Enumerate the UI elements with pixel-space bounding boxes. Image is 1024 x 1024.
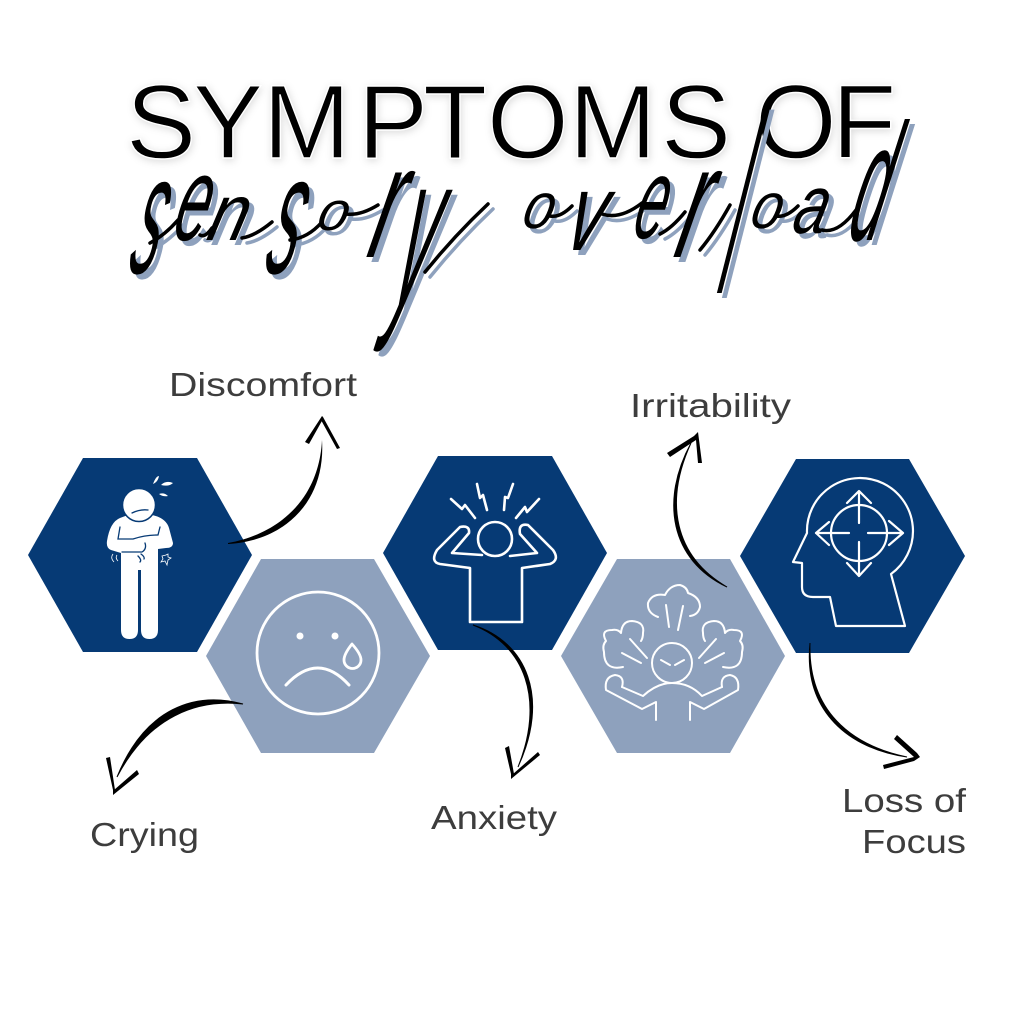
label: loss of focus: Loss of — [842, 782, 967, 819]
hexagon: anxiety — [383, 456, 607, 650]
title: sensory overload script: a — [786, 158, 842, 251]
title: sensory overload script: o — [517, 170, 565, 242]
title: sensory overload script: o — [312, 180, 358, 242]
arrow: to loss of focus — [809, 643, 920, 769]
title: sensory overload script: r — [663, 114, 737, 292]
title: sensory overload script: d — [836, 90, 918, 276]
arrow: to discomfort — [228, 416, 340, 544]
arrow: to irritability — [667, 432, 727, 587]
hexagon: loss of focus — [740, 459, 965, 653]
label: anxiety: Anxiety — [431, 799, 558, 836]
icon: angry person with steam clouds — [603, 585, 743, 720]
arrow: to anxiety — [473, 625, 540, 779]
icon: head with focus target — [793, 478, 913, 626]
icon: person holding stomach — [107, 476, 173, 639]
label: loss of focus: Focus — [862, 823, 966, 860]
title: sensory overload script: v — [557, 151, 626, 273]
label: crying: Crying — [90, 816, 199, 853]
title: sensory overload script: r — [356, 114, 430, 292]
title: symptoms of: SYMPTOMS OF — [126, 64, 896, 181]
title: sensory overload script: n — [201, 169, 262, 258]
title: sensory overload script — [117, 57, 918, 353]
title: sensory overload script: s — [253, 119, 331, 309]
hexagon: irritability — [561, 559, 785, 753]
title: sensory overload script: e — [164, 131, 230, 266]
arrow: to crying — [106, 700, 243, 795]
hexagon: crying — [206, 559, 430, 753]
label: irritability: Irritability — [630, 387, 792, 424]
icon: sad face with tear — [257, 592, 379, 714]
label: discomfort: Discomfort — [169, 366, 357, 403]
title: sensory overload script: o — [745, 170, 793, 242]
title: sensory overload script: s — [117, 119, 192, 310]
title: sensory overload script: e — [624, 133, 687, 263]
title: sensory overload script: l — [704, 57, 780, 349]
icon: stressed person with lightning — [434, 484, 556, 622]
title: sensory overload script: y — [372, 108, 473, 353]
hexagon: discomfort — [28, 458, 252, 652]
